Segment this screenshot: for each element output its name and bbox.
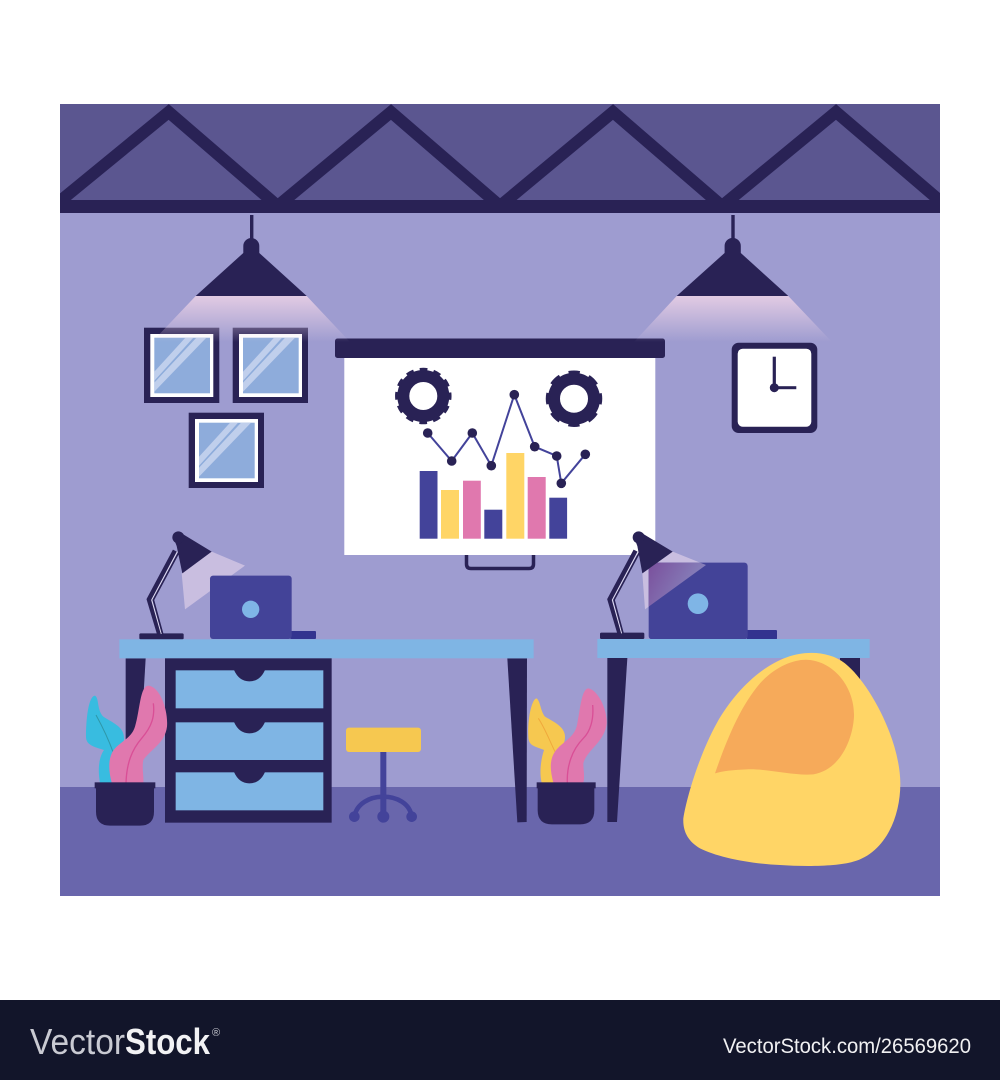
wall frames	[144, 328, 308, 488]
back wall	[60, 104, 940, 794]
screen hanger	[466, 555, 534, 568]
stool	[346, 728, 421, 823]
footer logo: Vector	[30, 1021, 125, 1062]
desk lamp light	[182, 552, 245, 609]
footer bar	[0, 1000, 1000, 1080]
wall clock	[732, 343, 817, 433]
footer logo: ®	[212, 1027, 220, 1039]
desk top	[119, 639, 534, 658]
desk leg left	[126, 658, 146, 823]
ceiling lamp right	[634, 215, 832, 342]
desk lamp light	[642, 552, 706, 609]
footer logo	[30, 1021, 220, 1062]
desk lamp	[139, 531, 212, 639]
laptop	[649, 563, 777, 639]
footer image id: VectorStock.com/26569620	[723, 1035, 971, 1058]
desk lamp	[600, 531, 673, 639]
gear left	[397, 370, 449, 422]
projection screen with chart	[335, 338, 665, 568]
laptop	[210, 576, 316, 639]
screen roller	[335, 338, 665, 358]
drawer unit	[165, 658, 332, 823]
desk top	[597, 639, 870, 658]
frame: bottom	[189, 413, 264, 488]
desk legs	[607, 658, 627, 822]
ceiling lamp left	[152, 215, 350, 342]
frame: top left	[144, 328, 219, 403]
screen surface	[344, 358, 655, 555]
beanbag chair	[683, 653, 900, 866]
line chart	[423, 390, 590, 488]
desk leg right	[507, 658, 527, 822]
desk right with lamp, laptop, plant, beanbag	[528, 531, 900, 866]
floor	[60, 787, 940, 896]
ceiling truss	[54, 104, 946, 213]
plant	[528, 688, 607, 824]
gear right	[548, 373, 600, 425]
bar chart	[420, 453, 567, 539]
plant	[86, 686, 167, 826]
footer logo: Stock	[125, 1021, 211, 1062]
desk left with lamp, laptop, drawers, plant	[86, 531, 534, 826]
frame: top right	[233, 328, 308, 403]
